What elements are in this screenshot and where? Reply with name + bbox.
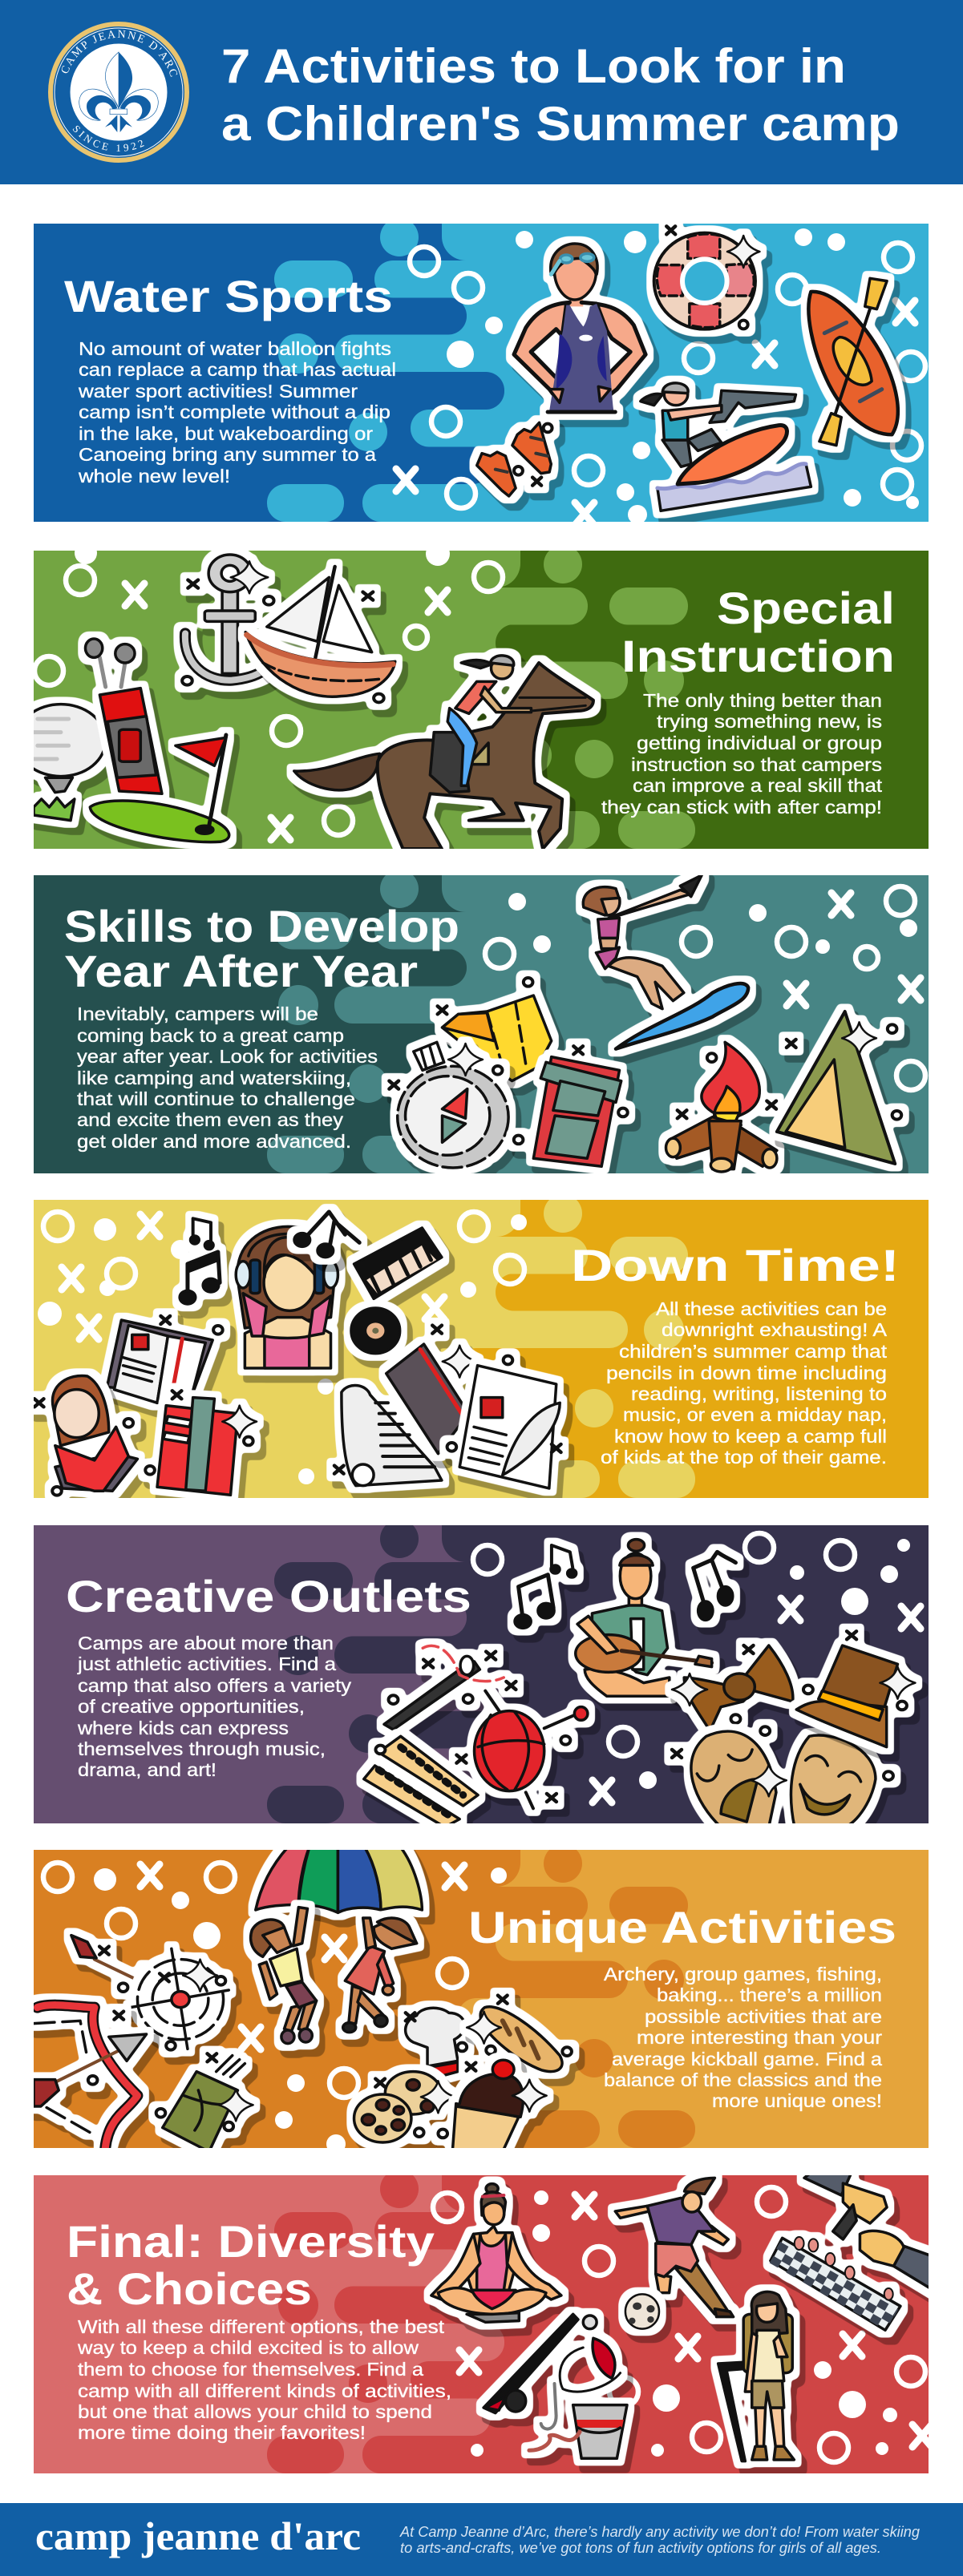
sticker: swimmer (514, 244, 645, 412)
text block: of kids at the top of their game. (601, 1447, 887, 1468)
sticker: cupcake (438, 2060, 547, 2152)
text block: where kids can express (77, 1718, 289, 1738)
text block: baking... there’s a million (657, 1984, 882, 2005)
logo: Camp Jeanne d'Arc seal: CAMP JEANNE D'ARC (61, 30, 178, 77)
heading: Instruction (621, 631, 895, 681)
sticker: girl with headphones (236, 1226, 338, 1368)
decor: rings, dots and crosses (433, 2187, 932, 2462)
logo: Camp Jeanne d'Arc seal (48, 22, 189, 163)
text block: music, or even a midday nap, (623, 1404, 887, 1425)
sticker: horse and rider (294, 656, 593, 849)
text block (601, 1298, 888, 1468)
text block: but one that allows your child to spend (78, 2401, 432, 2422)
sticker: arrow (71, 1936, 160, 1993)
sticker: sleeping bag (156, 2053, 253, 2152)
sticker: paper and quill (447, 1356, 561, 1488)
heading: & Choices (67, 2263, 312, 2314)
sticker: cookies (354, 2072, 455, 2142)
text block: balance of the classics and the (604, 2069, 882, 2090)
text block: can improve a real skill that (633, 775, 883, 796)
heading: Special (717, 583, 895, 633)
sticker: chef hat (406, 2008, 467, 2077)
title: 7 Activities to Look for in (221, 39, 846, 93)
decor: rings, dots and crosses (473, 1533, 921, 1803)
text block: whole new level! (78, 466, 230, 487)
text block: themselves through music, (78, 1738, 326, 1759)
text block: can replace a camp that has actual (79, 359, 396, 380)
text block: get older and more advanced. (77, 1131, 351, 1152)
panel: special instruction (34, 551, 929, 849)
heading: Down Time! (571, 1240, 900, 1290)
heading (621, 583, 895, 681)
panel: skills to develop (34, 875, 929, 1173)
panel: down time (34, 1200, 929, 1498)
text block: like camping and waterskiing, (77, 1068, 351, 1088)
decor: rings, dots and crosses (34, 542, 503, 840)
text block (604, 1964, 882, 2111)
text block: year after year. Look for activities (77, 1046, 378, 1067)
text block: camp that also offers a variety (78, 1675, 352, 1696)
sticker: sailboat (245, 567, 395, 702)
text block: just athletic activities. Find a (77, 1653, 336, 1674)
sticker: golf ball on tee (16, 705, 106, 821)
text block: instruction so that campers (631, 754, 882, 775)
sticker: ball of yarn (456, 1691, 588, 1808)
sticker: campfire (666, 1042, 777, 1172)
sticker: piano keyboard (354, 1228, 442, 1298)
sticker: double note (294, 1212, 359, 1258)
text block: in the lake, but wakeboarding or (79, 423, 373, 444)
text block: downright exhausting! A (662, 1319, 888, 1340)
sticker: archery target (131, 1948, 229, 2050)
text block: Inevitably, campers will be (77, 1003, 318, 1024)
sticker: backpack (514, 1046, 628, 1166)
text block: more time doing their favorites! (78, 2422, 366, 2443)
sticker: life ring (654, 226, 759, 329)
panel: creative outlets (34, 1525, 929, 1823)
sticker: girl reading (34, 1375, 137, 1496)
text block: more unique ones! (712, 2090, 882, 2111)
sticker: kayak and paddle (808, 278, 898, 446)
sticker: treasure map (438, 978, 552, 1081)
text block: children’s summer camp that (619, 1341, 888, 1362)
text block: way to keep a child excited is to allow (77, 2337, 419, 2358)
heading: Unique Activities (468, 1902, 896, 1952)
footer note: to arts-and-crafts, we’ve got tons of fun activity options for girls of all ages. (400, 2540, 881, 2556)
text block: No amount of water balloon fights (79, 338, 391, 359)
text block: drama, and art! (78, 1759, 216, 1780)
sticker: soccer player (615, 2178, 734, 2317)
text block: them to choose for themselves. Find a (78, 2359, 423, 2380)
heading (64, 901, 459, 996)
sticker: water skier (583, 875, 748, 1049)
sticker: vinyl record (351, 1308, 400, 1354)
text block (77, 1003, 378, 1152)
footer band (0, 2503, 963, 2576)
text block: All these activities can be (656, 1298, 887, 1319)
sticker: bread loaf (467, 1996, 572, 2072)
sticker: hat (796, 1631, 916, 1747)
sticker: swim fins (477, 422, 552, 496)
text block (77, 2316, 451, 2443)
sticker: book stack (145, 1391, 257, 1495)
text block: Archery, group games, fishing, (604, 1964, 882, 1984)
sticker: double note (694, 1552, 735, 1620)
text block (601, 690, 883, 818)
sticker: open book (107, 1316, 223, 1403)
sticker: wakeboarder (641, 383, 811, 511)
title (221, 39, 900, 151)
heading: Year After Year (64, 946, 418, 996)
sticker: falling child one (251, 1908, 317, 2044)
sticker: hiker with walking stick (718, 2291, 794, 2461)
text block: Camps are about more than (78, 1633, 334, 1653)
text block: and excite them even as they (77, 1109, 344, 1130)
text block: trying something new, is (657, 711, 882, 732)
text block: pencils in down time including (606, 1363, 887, 1383)
sticker: putting green with flag (90, 735, 229, 842)
text block: coming back to a great camp (77, 1025, 344, 1046)
text block: they can stick with after camp! (601, 797, 882, 818)
panel: diversity and choices (34, 2175, 929, 2473)
text block: water sport activities! Summer (78, 381, 358, 402)
sticker: bow tie (672, 1645, 793, 1731)
text block: getting individual or group (637, 733, 882, 753)
sticker: sewing needle (384, 1645, 516, 1730)
sticker: soccer ball (625, 2294, 659, 2329)
header band (0, 0, 963, 184)
panel: water sports (34, 224, 929, 522)
heading: Creative Outlets (66, 1571, 471, 1621)
text block: of creative opportunities, (78, 1696, 305, 1717)
sticker: compass (389, 1042, 508, 1168)
sticker: dark notebook (386, 1326, 477, 1454)
sticker: golf bag (85, 639, 162, 793)
sticker: chess game with hands (771, 2173, 937, 2330)
text block: Canoeing bring any summer to a (79, 444, 376, 465)
sticker: anchor (182, 555, 274, 685)
text block: camp with all different kinds of activities, (78, 2380, 451, 2401)
sticker: music notes (515, 1545, 577, 1628)
text block: reading, writing, listening to (631, 1383, 887, 1404)
panel: unique activities (34, 1850, 929, 2148)
text block (78, 338, 396, 487)
sticker: rulers (364, 1736, 478, 1827)
heading (67, 2216, 435, 2314)
footer note: At Camp Jeanne d’Arc, there’s hardly any activity we don’t do! From water skiing (399, 2524, 920, 2540)
text block: average kickball game. Find a (612, 2049, 882, 2069)
sticker: bow and arrow (34, 2005, 147, 2148)
sticker: yoga pose (431, 2184, 561, 2322)
text block: possible activities that are (645, 2006, 882, 2027)
text block: With all these different options, the best (78, 2316, 445, 2337)
sticker: theatre masks (672, 1726, 893, 1827)
text block: more interesting than your (637, 2027, 882, 2048)
decor: rings, dots and crosses (43, 1863, 507, 2154)
sticker: girl with guitar (576, 1540, 712, 1696)
sticker: music notes (180, 1218, 220, 1304)
text block (77, 1633, 352, 1780)
decor: rings, dots and crosses (396, 228, 925, 525)
text block: The only thing better than (643, 690, 882, 711)
sticker: falling child two (343, 1918, 417, 2033)
sticker: tent (777, 1011, 901, 1164)
text block: camp isn’t complete without a dip (79, 402, 390, 422)
heading: Water Sports (64, 271, 393, 321)
logo: Camp Jeanne d'Arc seal: SINCE 1922 (72, 125, 144, 151)
heading: Skills to Develop (64, 901, 459, 951)
sticker: scroll (334, 1385, 442, 1486)
footer logo wordmark: camp jeanne d'arc (35, 2513, 361, 2558)
sticker: fishing rod, hook and bucket (484, 2314, 627, 2458)
heading: Final: Diversity (67, 2216, 435, 2267)
text block: that will continue to challenge (77, 1088, 355, 1109)
decor: rings, dots and crosses (38, 1212, 527, 1484)
title: a Children's Summer camp (221, 97, 900, 151)
footer note (399, 2524, 920, 2556)
sticker: parachute (256, 1847, 422, 1912)
text block: know how to keep a camp full (614, 1426, 887, 1447)
decor: rings, dots and crosses (485, 886, 925, 1090)
